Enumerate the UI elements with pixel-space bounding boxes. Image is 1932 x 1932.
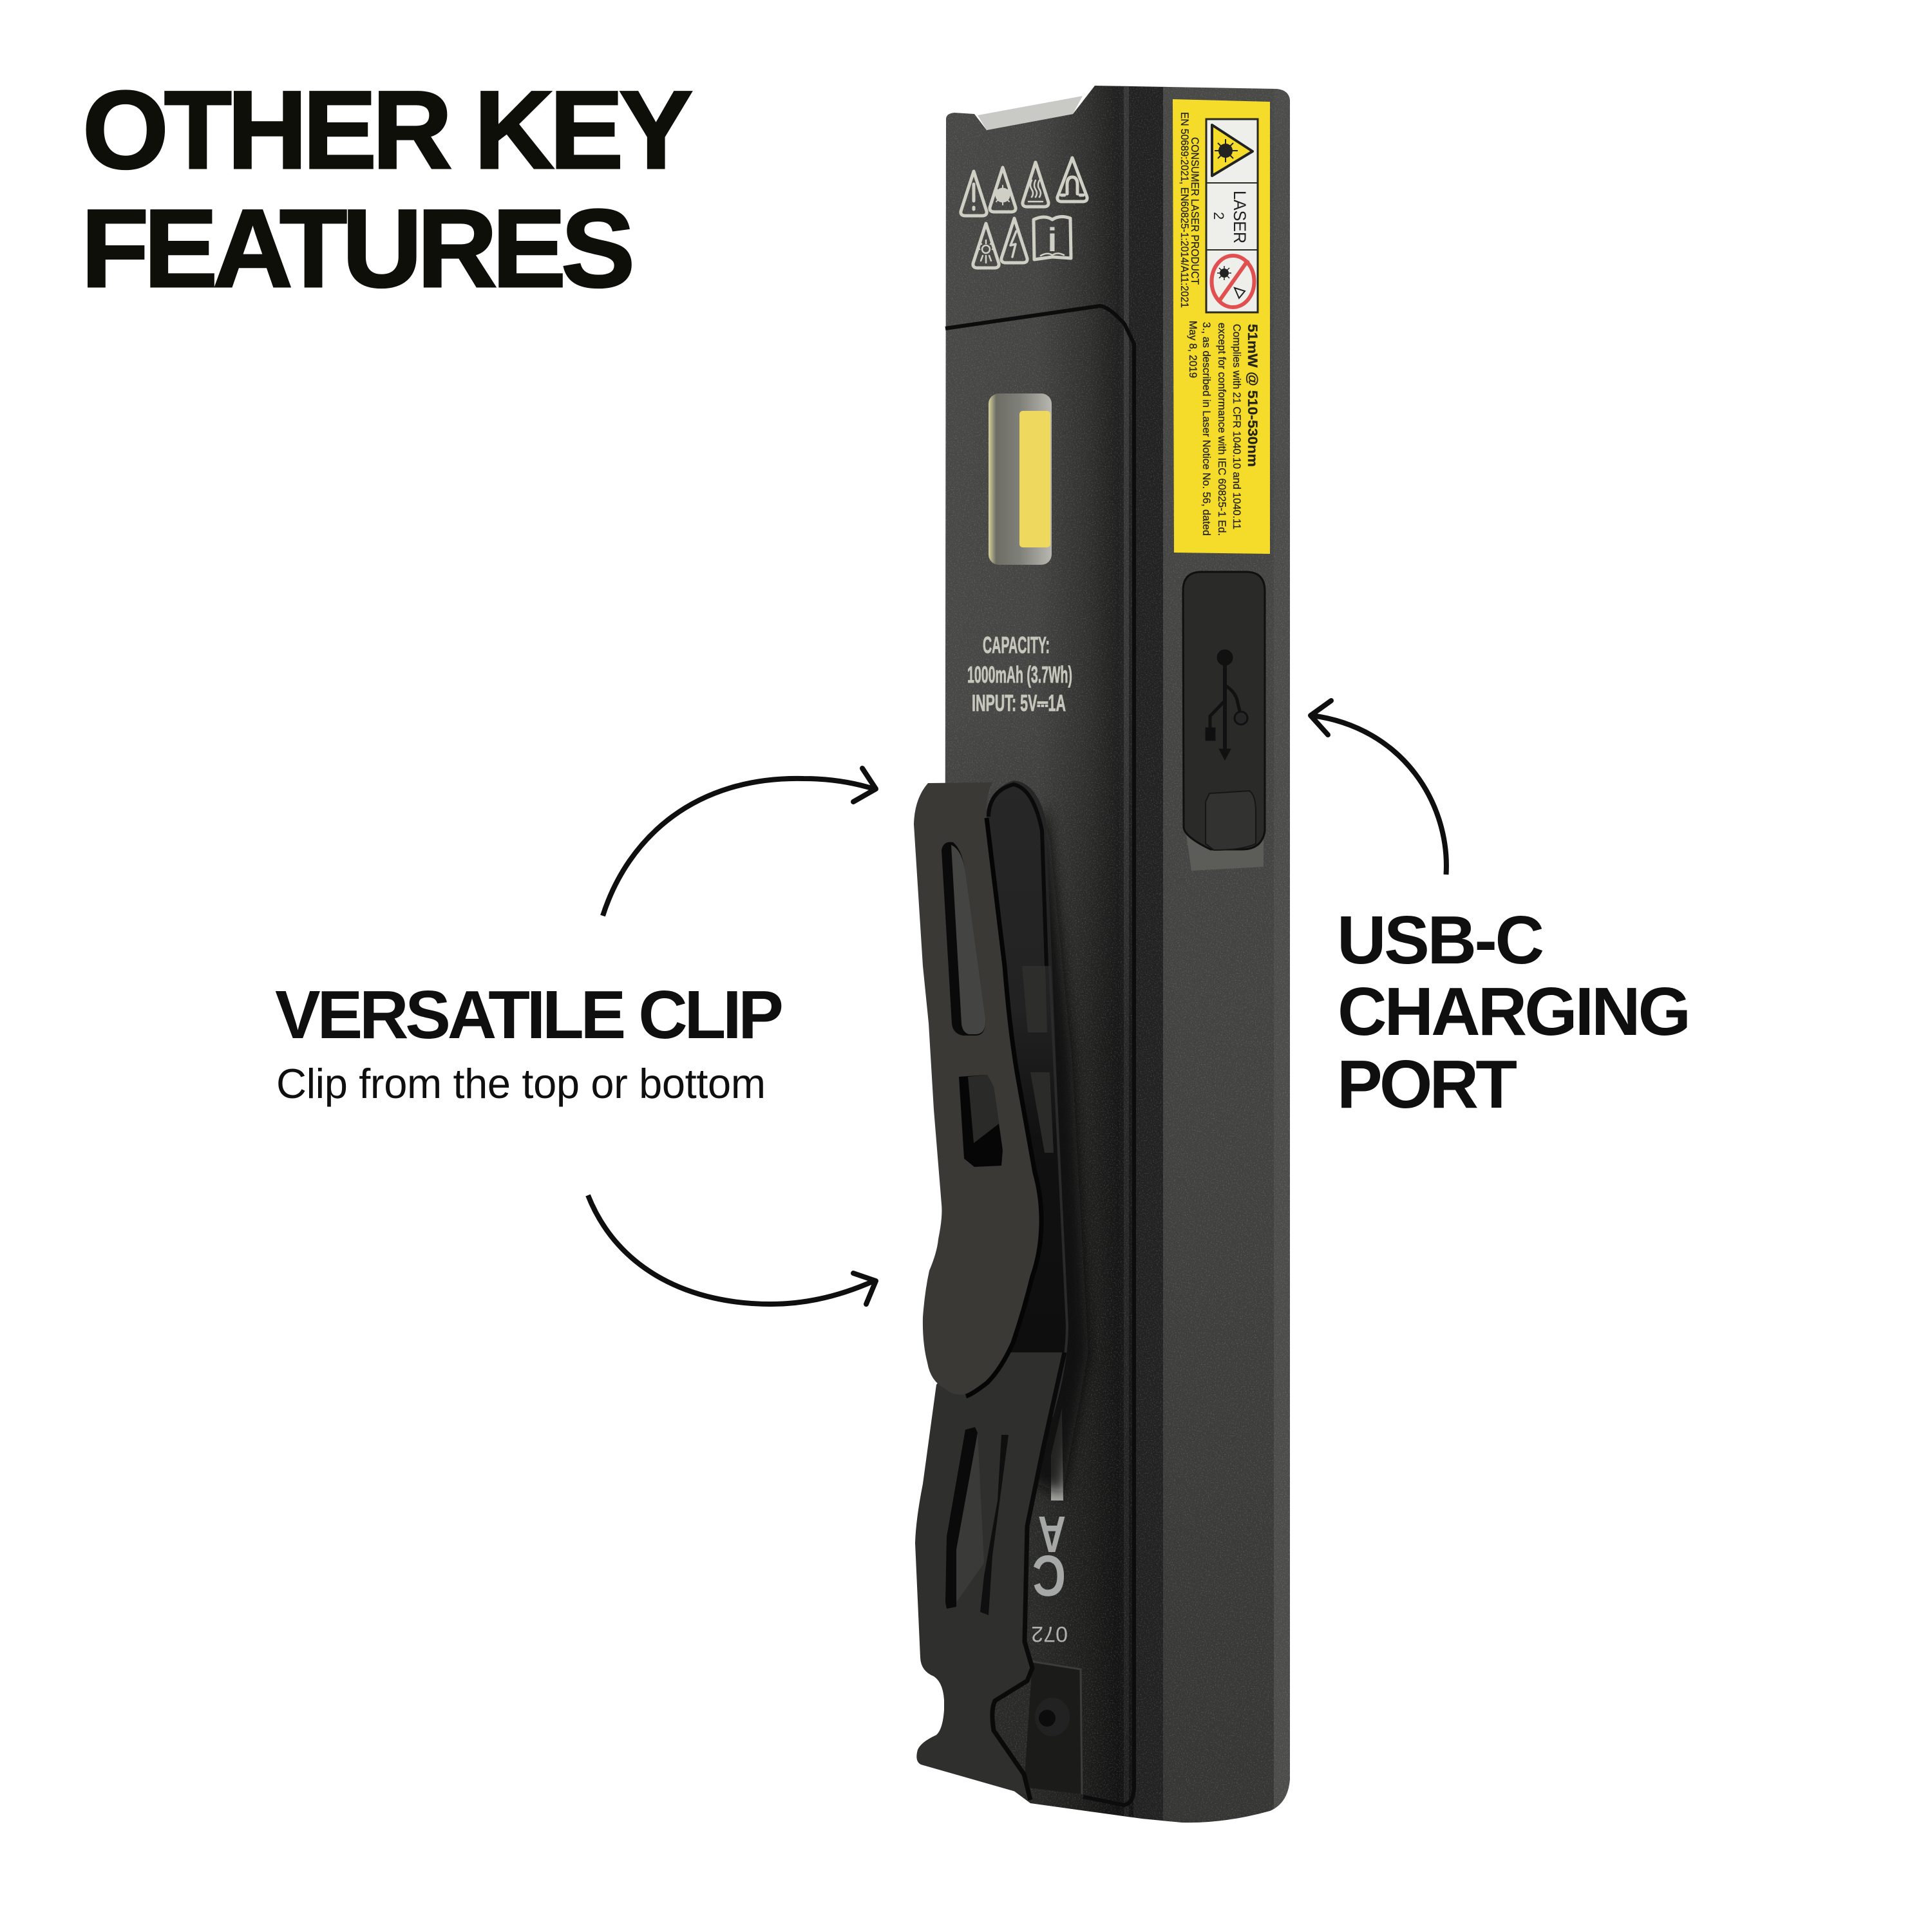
clip callout: Clip from the top or bottom	[276, 1060, 766, 1107]
icon: information manual	[1034, 216, 1071, 260]
printed marks behind clip	[1031, 1408, 1068, 1646]
USB-C callout: USB-C	[1337, 902, 1544, 978]
capacity text: 1000mAh (3.7Wh)	[967, 661, 1072, 688]
icon: laser triangle	[1212, 125, 1253, 176]
warning icons	[961, 158, 1087, 268]
clip lip edge	[989, 784, 1046, 966]
arrow: clip top	[603, 768, 876, 916]
USB-C callout: PORT	[1337, 1046, 1517, 1122]
printed marks behind clip: A	[1038, 1506, 1066, 1563]
USB-C callout	[1337, 902, 1691, 1122]
clip shadow	[1005, 805, 1088, 1494]
USB-C callout: CHARGING	[1338, 974, 1691, 1050]
arrow: USB port	[1311, 701, 1446, 875]
lower slot	[959, 1075, 1003, 1167]
capacity text: INPUT: 5V⎓1A	[972, 690, 1066, 716]
icon: magnet warning	[1057, 158, 1087, 202]
mounting bracket	[1024, 1662, 1082, 1794]
icon: USB symbol	[1206, 650, 1247, 760]
capacity text	[967, 632, 1072, 716]
port pull tab	[1206, 791, 1256, 850]
laser label text: EN 50689:2021, EN60825-1:2014/A11:2021	[1179, 112, 1191, 308]
clip front leaf	[914, 782, 1046, 1396]
laser warning box	[1206, 119, 1258, 312]
icon: laser burst warning	[990, 167, 1016, 212]
upper slot	[942, 842, 985, 1036]
device body	[944, 86, 1290, 1823]
laser warning box: 2	[1211, 212, 1227, 220]
icon: exclamation warning	[961, 171, 987, 216]
icon: electric shock warning	[1001, 218, 1027, 263]
laser label text: 51mW @ 510-530nm	[1245, 324, 1260, 467]
torx screw	[1035, 1698, 1070, 1736]
USB port rubber cover	[1183, 572, 1265, 871]
yellow laser label	[1173, 99, 1270, 554]
lower leaf spring edge	[992, 1352, 1065, 1800]
COB work light	[989, 393, 1052, 565]
title: FEATURES	[81, 187, 635, 310]
laser label text: Complies with 21 CFR 1040.10 and 1040.11	[1231, 324, 1243, 529]
capacity text: CAPACITY:	[983, 632, 1050, 658]
clip callout: VERSATILE CLIP	[275, 977, 784, 1053]
silver lens window	[978, 96, 1083, 130]
laser label text: May 8, 2019	[1187, 321, 1199, 378]
clip lower leaf	[915, 1352, 1065, 1800]
arrow: clip bottom	[588, 1195, 876, 1304]
laser label text: 3., as described in Laser Notice No. 56, dated	[1200, 322, 1213, 536]
clip assembly	[914, 781, 1088, 1800]
icon: bright light warning	[973, 223, 999, 268]
printed marks behind clip: 072	[1031, 1622, 1068, 1646]
icon: hot surface warning	[1023, 162, 1048, 207]
title	[81, 68, 693, 310]
manual i glyph: i	[1048, 222, 1057, 259]
inner panel seam	[945, 306, 1134, 1805]
laser label text: except for conformance with IEC 60825-1 Ed.	[1216, 323, 1228, 536]
clip callout	[275, 977, 784, 1107]
clip back plate	[953, 781, 1067, 1430]
printed marks behind clip: C	[1032, 1543, 1066, 1608]
laser label text	[1179, 112, 1260, 536]
title: OTHER KEY	[82, 68, 693, 192]
laser warning box: LASER	[1230, 191, 1249, 243]
lower leaf slots	[945, 1427, 978, 1609]
icon: no eye exposure	[1212, 256, 1255, 307]
product: flashlight device	[902, 64, 1301, 1835]
laser label text: CONSUMER LASER PRODUCT	[1189, 137, 1201, 285]
